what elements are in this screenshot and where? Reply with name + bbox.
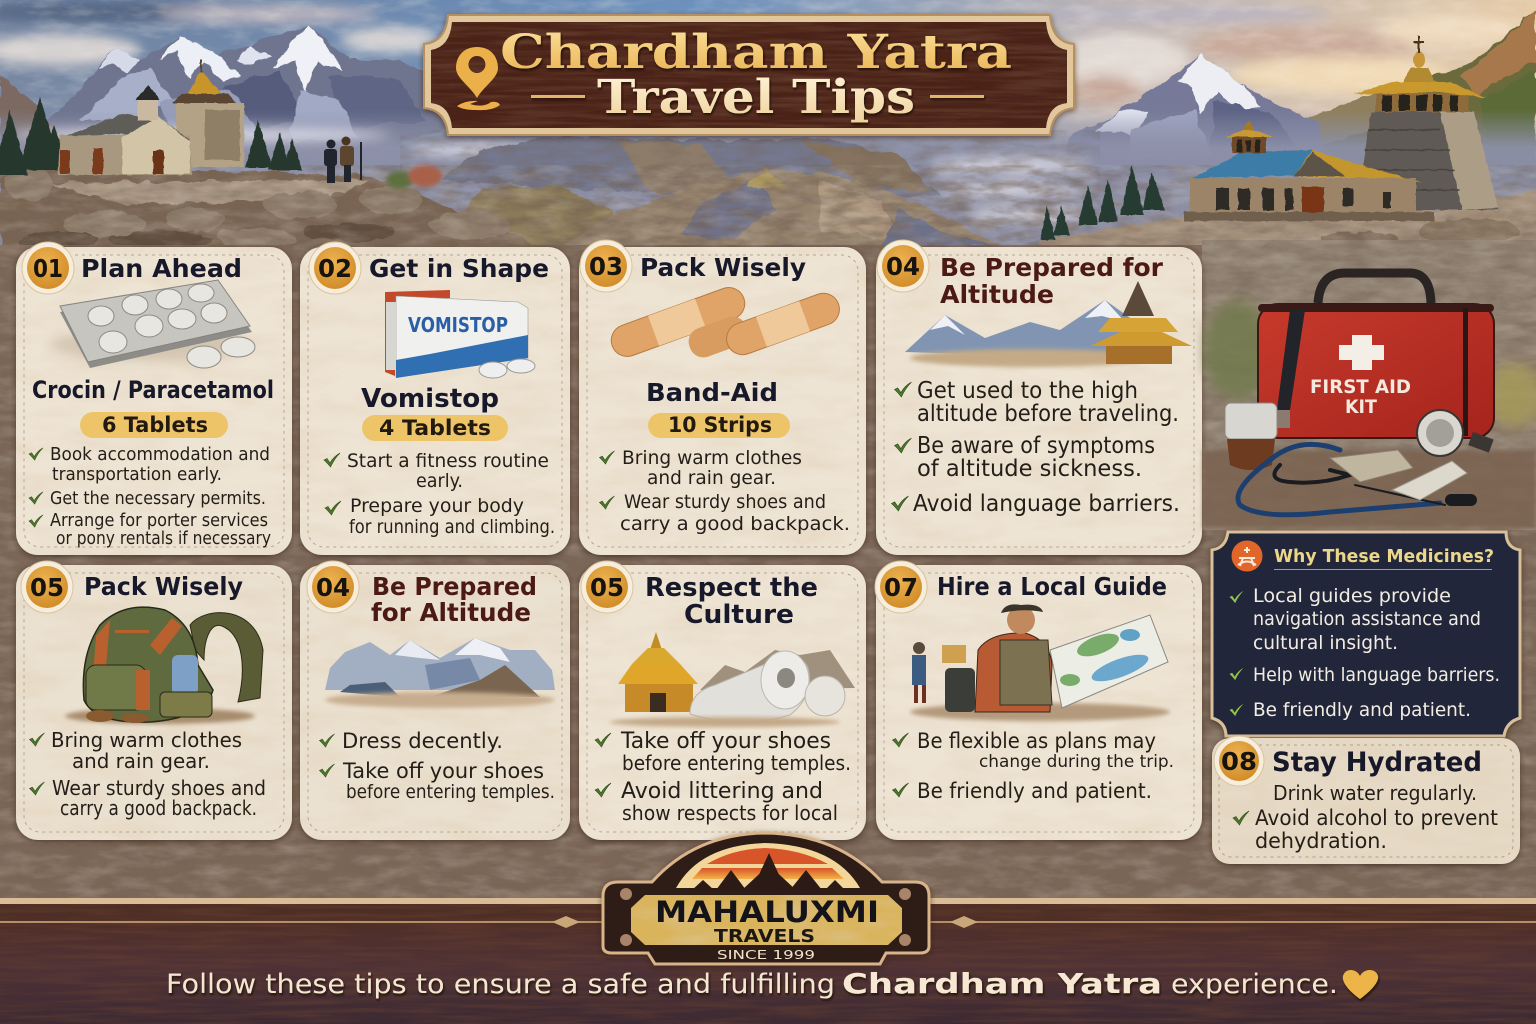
illustration: first aid kit (1203, 273, 1536, 528)
panel: 04 Be Prepared for Altitude (876, 240, 1202, 555)
pill: 6 Tablets (80, 412, 228, 438)
badge 07 (875, 561, 927, 613)
medicine name: Crocin / Paracetamol (32, 376, 274, 404)
tips list: Drink water regularly. (1273, 781, 1477, 805)
heading: for Altitude (371, 598, 531, 627)
logo: Mahaluxmi Travels (603, 833, 929, 964)
badge 05 (21, 561, 73, 613)
tips list: Take off your shoes (620, 729, 831, 754)
title text (500, 25, 1012, 125)
kit label (1310, 376, 1411, 418)
far mountains left (0, 25, 445, 175)
heading: Pack Wisely (640, 253, 806, 282)
logo plate: MAHALUXMI (655, 895, 879, 929)
tips list (30, 728, 266, 820)
title text: Travel Tips (597, 70, 915, 125)
badge 04: 04 (316, 573, 350, 602)
tips list: or pony rentals if necessary (56, 528, 271, 549)
tips list (29, 444, 271, 549)
heading: Culture (684, 600, 794, 630)
title banner (424, 15, 1074, 135)
kit label: FIRST AID (1310, 376, 1411, 398)
heading: Stay Hydrated (1272, 747, 1482, 778)
logo sunset and trees (620, 843, 911, 946)
badge 02: 02 (318, 254, 352, 283)
pill: 4 Tablets: 4 Tablets (379, 416, 491, 440)
image: guide with map (910, 604, 1170, 721)
tips list (595, 729, 851, 825)
image: temple and cotton rolls (610, 632, 855, 727)
tips list: Help with language barriers. (1253, 664, 1500, 686)
image: tablet blister pack (50, 280, 255, 368)
tips list: Wear sturdy shoes and (624, 491, 826, 513)
badge 01 (22, 242, 74, 294)
tips list: Bring warm clothes (51, 728, 242, 752)
badge 04 (877, 240, 929, 292)
heading: Get in Shape (369, 254, 549, 283)
tips list: Local guides provide (1253, 585, 1451, 607)
badge 08: 08 (1221, 747, 1257, 776)
pill: 10 Strips: 10 Strips (668, 413, 772, 437)
badge 07: 07 (884, 573, 918, 602)
tips list: change during the trip. (979, 752, 1174, 772)
badge 03 (580, 240, 632, 292)
tips list: Dress decently. (342, 729, 503, 753)
tips list: Book accommodation and (50, 444, 270, 465)
panel: 08 Stay Hydrated (1212, 736, 1520, 864)
tips list (1233, 781, 1498, 853)
logo since: SINCE 1999 (717, 948, 815, 962)
tips list (320, 729, 555, 803)
heading: Altitude (940, 280, 1054, 309)
heading: Hire a Local Guide (937, 572, 1167, 601)
tips list: Start a fitness routine (347, 450, 549, 472)
badge 08 (1214, 736, 1264, 786)
image: hiking backpack (65, 607, 263, 724)
panel: 02 Get in Shape (300, 242, 570, 555)
tips list: Be aware of symptoms (917, 433, 1155, 459)
logo plate (631, 895, 902, 947)
badge 01: 01 (33, 254, 63, 283)
tips list: Be friendly and patient. (917, 779, 1152, 803)
scene: right temple and tower (1040, 36, 1498, 240)
tips list (1230, 585, 1500, 721)
title text: Chardham Yatra (500, 25, 1012, 80)
image: Vomistop medicine box (385, 290, 535, 378)
medicine name: Vomistop (361, 384, 499, 414)
tips list: show respects for local (622, 801, 838, 825)
heading (940, 253, 1164, 309)
footer band (0, 898, 1536, 1024)
tips list: navigation assistance and (1253, 608, 1481, 630)
icon: medical emblem (1232, 540, 1262, 572)
tips list: altitude before traveling. (917, 401, 1179, 427)
panel heading: Why These Medicines? (1274, 546, 1494, 567)
tips list: early. (416, 470, 463, 492)
badge 05 (581, 561, 633, 613)
badge 02 (309, 242, 361, 294)
scene: hikers (324, 136, 362, 183)
heading: Plan Ahead (81, 254, 242, 283)
scene: flowering shrub (386, 165, 442, 189)
badge 04: 04 (886, 252, 920, 281)
image: mountains and temple (905, 281, 1192, 367)
tips list: Get the necessary permits. (50, 488, 266, 509)
tips list: Arrange for porter services (50, 510, 268, 531)
tips list (892, 378, 1180, 517)
rocky ground left (0, 168, 560, 260)
tips list: transportation early. (52, 464, 222, 485)
scene: left temple (0, 60, 302, 175)
tips list: Be flexible as plans may (917, 729, 1156, 753)
tips list (600, 447, 850, 535)
tips list: Be friendly and patient. (1253, 699, 1471, 721)
tips list: and rain gear. (72, 749, 210, 773)
tips list: before entering temples. (346, 781, 555, 803)
pill: 4 Tablets (362, 415, 508, 441)
icon: location pin (456, 47, 500, 110)
tips list: and rain gear. (647, 467, 776, 489)
badge 05: 05 (590, 573, 624, 602)
rocky ground right (1030, 190, 1536, 270)
tips list: carry a good backpack. (620, 513, 850, 535)
tips list: cultural insight. (1253, 632, 1398, 654)
heading (371, 572, 537, 627)
kit label: KIT (1345, 396, 1377, 418)
panel: 01 Plan Ahead (16, 242, 292, 555)
tips list: of altitude sickness. (917, 456, 1142, 482)
sky (0, 0, 1536, 260)
heading: Be Prepared for (940, 253, 1164, 282)
tips list (324, 450, 555, 538)
tips list: Get used to the high (917, 378, 1138, 404)
mid valley: clouds and distant ridges (0, 110, 1536, 260)
panel: Why These Medicines? (1212, 532, 1520, 736)
heading: Respect the (645, 573, 818, 603)
tips list: Bring warm clothes (622, 447, 802, 469)
tips list: before entering temples. (622, 751, 851, 775)
right hillside (1260, 8, 1536, 240)
tips list: Avoid alcohol to prevent (1255, 806, 1498, 830)
tips list: Avoid littering and (621, 779, 823, 804)
tips list: for running and climbing. (349, 516, 555, 538)
image: adhesive bandages (607, 283, 844, 361)
tips list: carry a good backpack. (60, 796, 257, 820)
tips list: Take off your shoes (342, 759, 544, 783)
panel: 03 Pack Wisely (579, 240, 866, 555)
footer message: experience. (1171, 969, 1338, 1000)
panel: 05 Pack Wisely (16, 561, 292, 840)
heading (645, 573, 818, 630)
tips list (892, 729, 1174, 803)
panel: 05 Respect the Culture (579, 561, 866, 840)
medicine name: Band-Aid (646, 378, 778, 407)
tips list: dehydration. (1255, 829, 1387, 853)
ground and lower body (0, 245, 1536, 905)
icon: heart (1343, 970, 1378, 999)
footer message: Chardham Yatra (842, 967, 1162, 1000)
pill: 6 Tablets: 6 Tablets (102, 413, 208, 437)
logo plate: TRAVELS (714, 926, 815, 947)
image: mountain range (325, 638, 555, 708)
footer message: Follow these tips to ensure a safe and fulfilling (166, 969, 835, 1000)
badge 04 (307, 561, 359, 613)
far mountain right (1060, 55, 1320, 190)
heading: Be Prepared (372, 572, 537, 601)
badge 03: 03 (589, 252, 623, 281)
tips list: Wear sturdy shoes and (52, 776, 266, 800)
footer message (166, 967, 1378, 1000)
heading: Pack Wisely (84, 572, 243, 601)
image: Vomistop medicine box: VOMISTOP (408, 313, 508, 337)
panel: 04 Be Prepared for Altitude (second) (300, 561, 570, 840)
panel: 07 Hire a Local Guide (875, 561, 1202, 840)
badge 05: 05 (30, 573, 64, 602)
tips list: Prepare your body (350, 495, 524, 517)
tips list: Avoid language barriers. (913, 491, 1180, 517)
